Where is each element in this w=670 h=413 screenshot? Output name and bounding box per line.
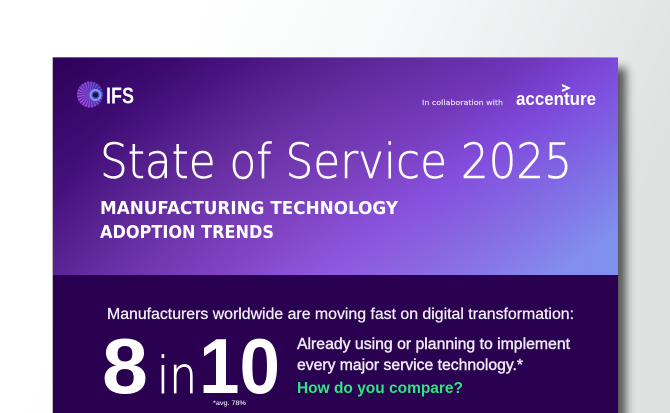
subtitle [100, 198, 399, 243]
stat description [297, 336, 571, 374]
subtitle: MANUFACTURING TECHNOLOGY [100, 198, 399, 219]
stat description: every major service technology.* [297, 357, 523, 374]
intro text: Manufacturers worldwide are moving fast on digital transformation: [107, 306, 574, 323]
panel: statistics [53, 275, 618, 413]
big stat: 8 in 10: 8 [102, 322, 148, 410]
big stat: 8 in 10 [102, 322, 280, 410]
collaboration label: In collaboration with [422, 99, 503, 107]
big stat: 8 in 10: in [157, 347, 197, 406]
title: State of Service 2025 [100, 134, 572, 190]
big stat: 8 in 10: 10 [199, 322, 280, 410]
panel shadow [60, 68, 626, 413]
subtitle: ADOPTION TRENDS [100, 222, 274, 243]
panel: header banner [53, 57, 618, 275]
call to action: How do you compare? [297, 380, 463, 397]
logo wordmark: IFS [106, 82, 134, 108]
footnote: *avg. 78% [213, 400, 246, 407]
icon: IFS sunburst logo [77, 82, 103, 108]
accenture logo: accenture [516, 89, 596, 109]
stat description: Already using or planning to implement [297, 336, 571, 353]
